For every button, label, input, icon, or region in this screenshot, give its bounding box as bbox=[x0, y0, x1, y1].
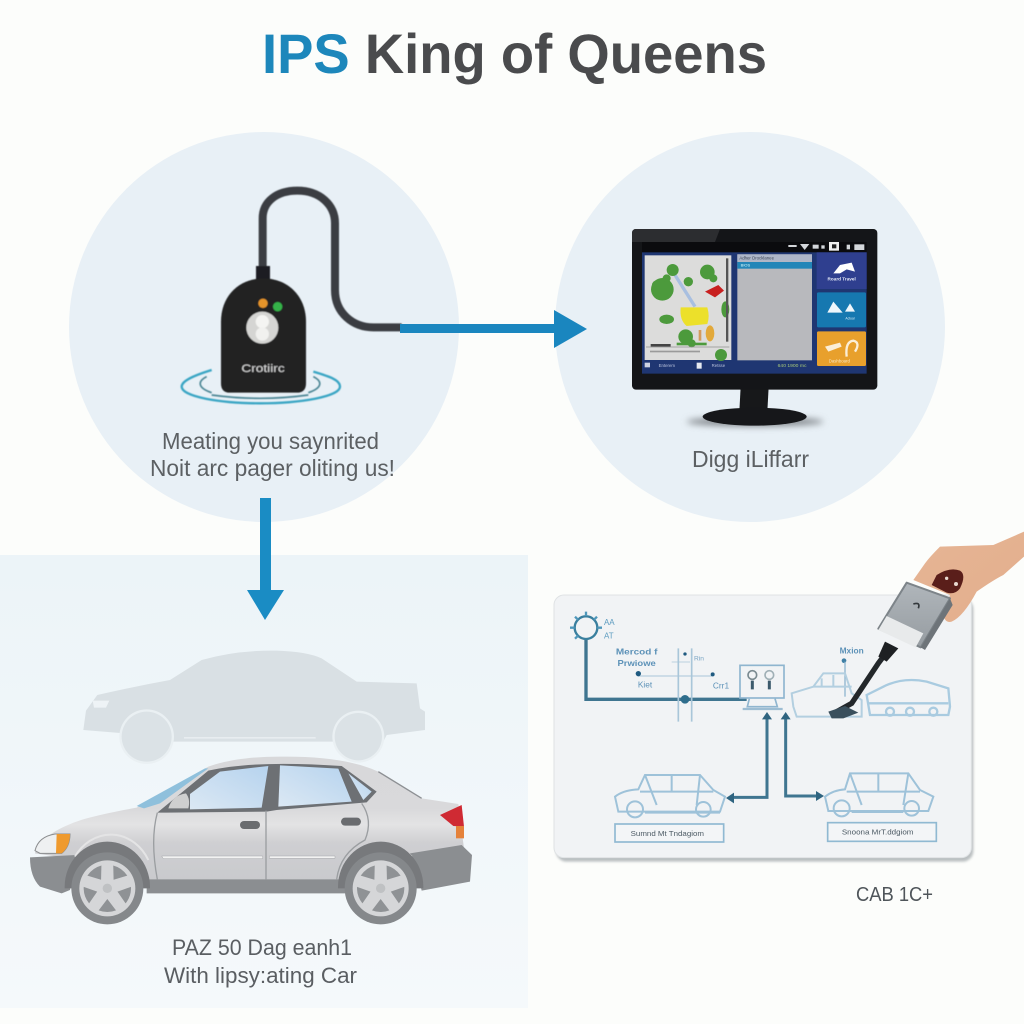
icon: outline car lower left bbox=[615, 775, 725, 817]
scanner body bbox=[878, 583, 950, 647]
tail light bbox=[440, 805, 464, 827]
list panel bbox=[737, 254, 812, 360]
text: monitor caption: Digg iLiffarr bbox=[692, 446, 809, 472]
icon: sun gauge: AA bbox=[604, 618, 615, 627]
tile: orange: Dashboard bbox=[829, 359, 851, 364]
icon: central module bbox=[740, 665, 784, 709]
arrow: right to monitor bbox=[400, 310, 587, 348]
tile: navy bbox=[817, 252, 867, 289]
status bar icons bbox=[788, 242, 864, 251]
quarter window bbox=[348, 773, 372, 800]
tile: blue: Actual bbox=[845, 316, 855, 320]
panel: monitor circle bbox=[555, 132, 945, 522]
text: device caption: Noit arc pager oliting us! bbox=[150, 455, 395, 481]
icon: outline car upper right bbox=[867, 680, 950, 716]
panel: bottom-left car background bbox=[0, 555, 528, 1008]
labels and minor lines: Mercod f bbox=[616, 647, 658, 657]
labels and minor lines bbox=[616, 645, 864, 722]
car body bbox=[35, 757, 464, 881]
hand bbox=[913, 532, 1024, 622]
icon: sun gauge bbox=[570, 612, 615, 640]
rear window bbox=[278, 765, 352, 807]
map panel bbox=[645, 255, 731, 361]
labels and minor lines: Crr1 bbox=[713, 680, 729, 690]
mirror bbox=[168, 793, 189, 808]
text: device caption: Meating you saynrited bbox=[162, 428, 379, 454]
front wheel bbox=[65, 842, 150, 924]
list panel: Adher Drocklanee bbox=[739, 256, 775, 261]
taskbar: 640 1900 mc bbox=[778, 363, 807, 369]
icon: computer monitor bbox=[632, 229, 877, 426]
cable bbox=[837, 650, 888, 712]
arrow: down to car bbox=[247, 498, 284, 620]
icon: outline car lower right bbox=[825, 773, 933, 816]
icon: OBD device with cable bbox=[182, 191, 402, 403]
title: IPS King of Queens bbox=[262, 22, 767, 85]
panel: wiring diagram bbox=[554, 595, 973, 862]
taskbar: Enterem bbox=[659, 363, 675, 368]
labels and minor lines: Kiet bbox=[638, 679, 653, 689]
icon: OBD device with cable: Crotiirc bbox=[241, 363, 285, 375]
icon: silver sedan bbox=[30, 757, 472, 924]
gap between fingers bbox=[932, 569, 963, 593]
rear wheel bbox=[338, 842, 423, 924]
arrows to bottom cars bbox=[726, 712, 824, 803]
door seams and handles bbox=[154, 803, 368, 879]
icon: sun gauge: AT bbox=[604, 631, 614, 640]
label box left bbox=[615, 824, 724, 842]
wheel arch highlights bbox=[75, 835, 412, 863]
lower bumpers and sill bbox=[30, 845, 472, 893]
text: car caption: PAZ 50 Dag eanh1 bbox=[172, 935, 352, 960]
labels and minor lines: Rin bbox=[694, 656, 704, 663]
icon: hand holding scanner bbox=[828, 532, 1024, 718]
icon: ghost car silhouette bbox=[83, 651, 425, 764]
tile: blue bbox=[817, 292, 866, 327]
panel: device circle bbox=[69, 132, 459, 522]
labels and minor lines: Prwiowe bbox=[617, 658, 656, 668]
windshield bbox=[137, 768, 208, 808]
taskbar: Retsse bbox=[712, 363, 726, 368]
text: corner code: CAB 1C+ bbox=[856, 884, 933, 906]
labels and minor lines: Mxion bbox=[840, 645, 864, 655]
tile: navy: Roard Travel bbox=[828, 276, 856, 281]
main bus line bbox=[586, 640, 747, 699]
label box right bbox=[828, 823, 936, 841]
headlight bbox=[35, 834, 70, 853]
tile: orange bbox=[817, 331, 866, 366]
window frame bbox=[157, 764, 377, 813]
front window bbox=[190, 766, 268, 809]
label box right: Snoona MrT.ddgiom bbox=[842, 827, 913, 836]
rear deck shading bbox=[378, 772, 422, 798]
list panel: BIOS bbox=[741, 263, 751, 268]
icon: outline car upper middle bbox=[792, 673, 862, 717]
label box left: Sumnd Mt Tndagiom bbox=[631, 829, 704, 838]
text: car caption: With lipsy:ating Car bbox=[164, 963, 357, 988]
taskbar bbox=[644, 361, 817, 373]
